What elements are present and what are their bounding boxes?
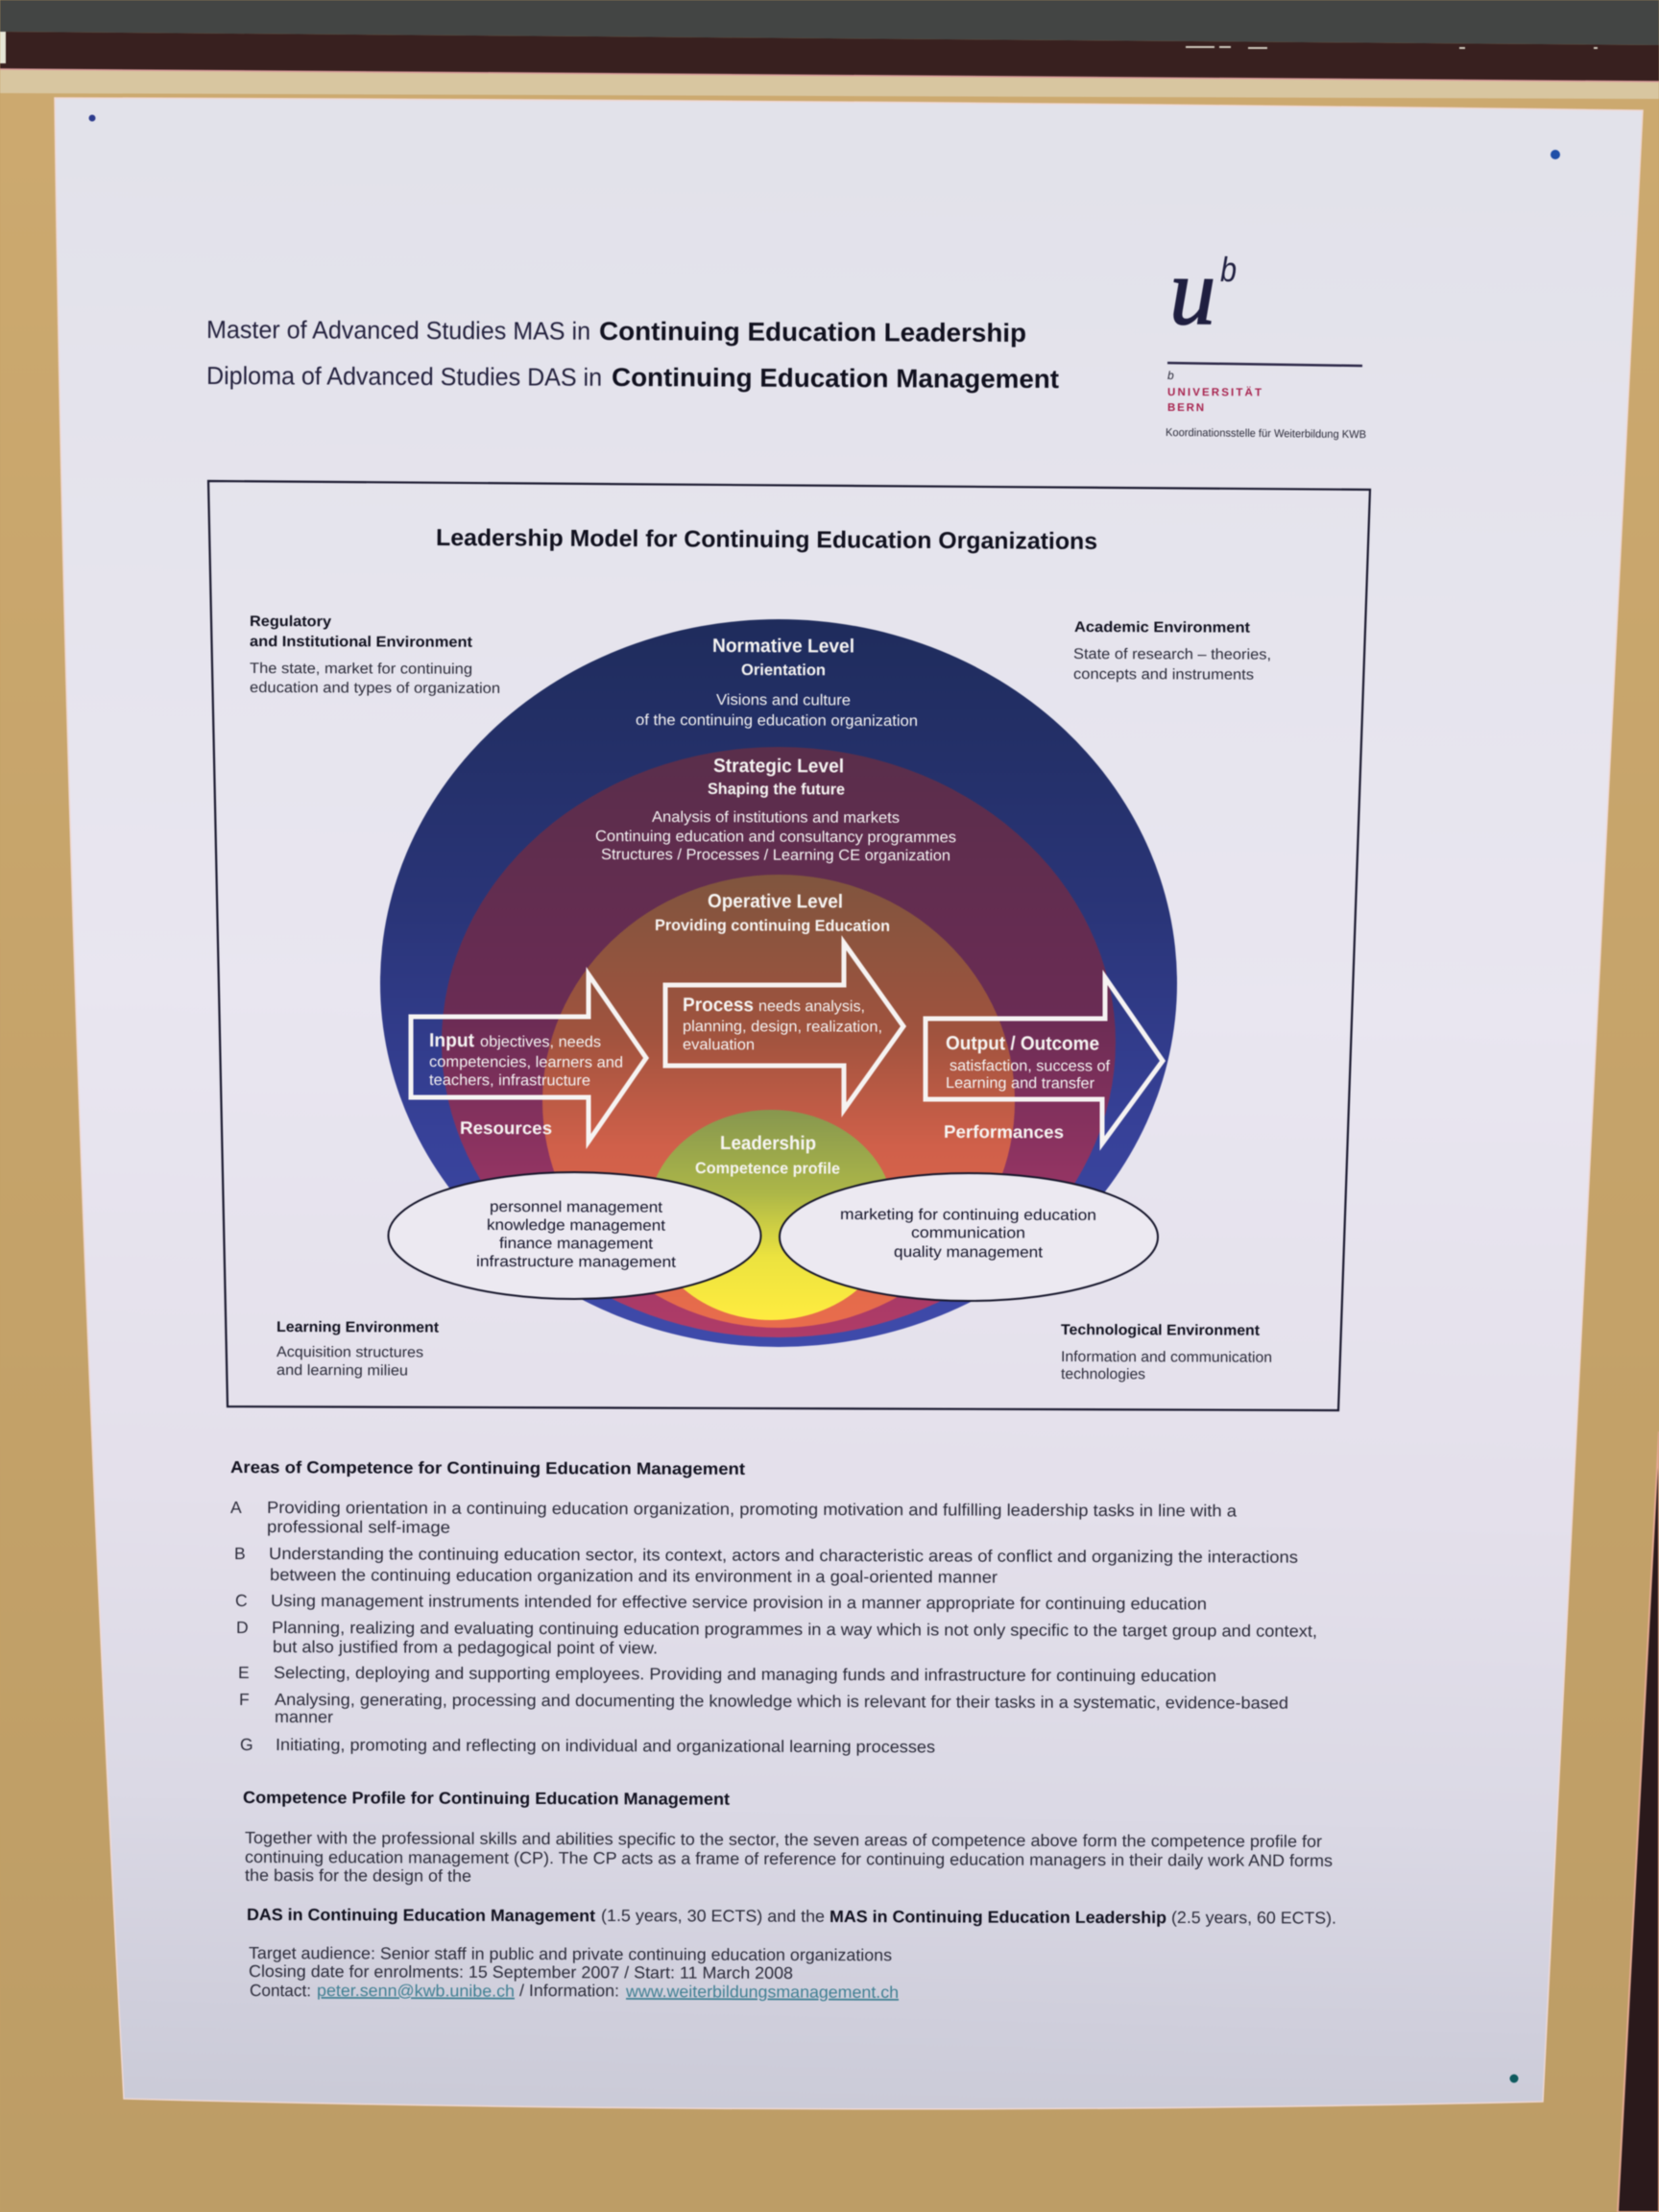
label: operative level: Operative Level — [708, 891, 843, 912]
arrow label: output / outcome: Output / Outcome — [946, 1033, 1099, 1055]
item G: G — [240, 1735, 253, 1754]
callout: left oval: finance management — [499, 1236, 654, 1253]
callout: right oval — [780, 1173, 1158, 1301]
label: operative level: Providing continuing Education — [655, 917, 890, 935]
logo mark: u: u — [1169, 238, 1215, 345]
label: normative level: Visions and culture — [716, 692, 851, 709]
arrow label: process: needs analysis, — [758, 998, 865, 1015]
item C: C — [235, 1591, 248, 1610]
text block: academic environment: concepts and instruments — [1073, 666, 1254, 684]
logo wordmark — [1167, 386, 1262, 414]
heading: areas of competence: Areas of Competence for Continuing Education Management — [230, 1457, 745, 1479]
background: pink highlight under rail — [0, 69, 1659, 82]
text block: programme durations — [247, 1905, 1336, 1928]
ring: operative level — [542, 875, 1015, 1328]
label: operative level — [655, 891, 890, 935]
label: strategic level: Analysis of institutions and markets — [652, 809, 900, 827]
text block: learning environment: Learning Environment — [276, 1319, 439, 1336]
callout: left oval: infrastructure management — [476, 1254, 677, 1271]
arrow: output / outcome — [926, 977, 1163, 1143]
arrow label: output / outcome — [946, 1033, 1111, 1093]
panel: leadership model frame — [208, 481, 1370, 1410]
logo small b: b — [1167, 369, 1174, 382]
item B — [234, 1544, 1298, 1587]
callout: left oval: personnel management — [490, 1199, 663, 1216]
arrow label: input: teachers, infrastructure — [429, 1072, 590, 1090]
header titles — [206, 315, 1059, 394]
label: strategic level: Shaping the future — [708, 781, 845, 798]
title line: DAS: Diploma of Advanced Studies DAS in — [206, 361, 602, 392]
arrow label: process: planning, design, realization, — [683, 1019, 882, 1036]
ring: normative level — [380, 619, 1177, 1347]
label: strategic level: Structures / Processes / Learning CE organization — [601, 847, 950, 864]
arrow label: output / outcome: satisfaction, success of — [950, 1058, 1111, 1075]
title line: MAS: Continuing Education Leadership — [599, 317, 1026, 348]
text block: technological environment: Information and communication — [1061, 1349, 1272, 1366]
item D: Planning, realizing and evaluating continuing education programmes in a way which is not only specific to the target group and context, — [272, 1618, 1317, 1641]
text block: technological environment: Technological Environment — [1061, 1322, 1260, 1339]
text block: programme durations: DAS in Continuing Education Management — [247, 1905, 595, 1925]
callout: right oval: quality management — [894, 1244, 1044, 1262]
pin: top left — [88, 115, 96, 121]
text block: competence profile paragraph: the basis for the design of the — [245, 1865, 471, 1886]
text block: regulatory environment — [250, 613, 500, 697]
arrow label: process — [683, 995, 882, 1053]
text block: technological environment: technologies — [1061, 1366, 1145, 1382]
text block: learning environment: and learning milieu — [276, 1362, 408, 1379]
item A: professional self-image — [267, 1517, 450, 1537]
callout: left oval — [388, 1172, 760, 1299]
item D: but also justified from a pedagogical point of view. — [273, 1637, 658, 1657]
text block: audience and contact: Contact: — [250, 1981, 311, 2000]
text block: learning environment — [276, 1319, 439, 1379]
background: dark brown rail — [0, 32, 1659, 82]
heading: competence profile: Competence Profile for Continuing Education Management — [243, 1788, 730, 1809]
item A — [230, 1498, 1237, 1537]
text block: regulatory environment: education and types of organization — [250, 680, 500, 697]
arrow label: input: competencies, learners and — [429, 1054, 623, 1071]
background: white tab at left edge — [0, 32, 6, 63]
chart: concentric leadership model — [380, 619, 1177, 1347]
text block: regulatory environment: Regulatory — [250, 613, 331, 630]
label: normative level: of the continuing education organization — [636, 712, 918, 730]
label: leadership: Leadership — [720, 1133, 816, 1154]
label: normative level — [636, 636, 918, 730]
logo mark: superscript b: b — [1220, 250, 1237, 289]
text block: competence profile paragraph: Together with the professional skills and abilities specific to the sector, the seven areas of competence above form the competence profile for — [245, 1828, 1322, 1851]
logo caption: Koordinationsstelle für Weiterbildung KWB — [1166, 427, 1366, 441]
label: performances: Performances — [944, 1121, 1064, 1142]
text block: programme durations: (1.5 years, 30 ECTS) and the — [601, 1906, 825, 1926]
item E: Selecting, deploying and supporting employees. Providing and managing funds and infrastructure for continuing education — [274, 1663, 1216, 1685]
text block: audience and contact: Closing date for enrolments: 15 September 2007 / Start: 11 March 2008 — [249, 1961, 793, 1983]
label: strategic level — [595, 756, 956, 864]
arrow label: input — [429, 1030, 623, 1090]
text block: academic environment: State of research – theories, — [1073, 646, 1271, 663]
callout: right oval: communication — [911, 1225, 1025, 1241]
item B: between the continuing education organization and its environment in a goal-oriented manner — [270, 1565, 998, 1587]
arrow label: input: objectives, needs — [480, 1034, 601, 1050]
ring: leadership core — [648, 1110, 894, 1320]
text block: learning environment: Acquisition structures — [276, 1344, 423, 1361]
text block: audience and contact: www.weiterbildungsmanagement.ch — [625, 1982, 899, 2002]
logo wordmark: BERN — [1167, 402, 1204, 414]
background: dark frame at right edge — [1618, 1431, 1659, 2212]
text block: academic environment — [1073, 619, 1271, 684]
text block: competence profile paragraph: continuing education management (CP). The CP acts as a frame of reference for continuing education managers in their daily work AND forms — [245, 1847, 1333, 1870]
item F: manner — [275, 1707, 333, 1726]
pin: top right — [1551, 150, 1560, 159]
item D: D — [236, 1618, 249, 1637]
title line: DAS — [206, 361, 1059, 394]
text block: competence profile paragraph — [245, 1828, 1333, 1886]
text block: audience and contact: Target audience: Senior staff in public and private continuing education organizations — [249, 1943, 892, 1964]
callout: right oval: marketing for continuing education — [840, 1207, 1096, 1224]
item A: Providing orientation in a continuing education organization, promoting motivation and fulfilling leadership tasks in line with a — [267, 1498, 1237, 1521]
panel heading: model title: Leadership Model for Continuing Education Organizations — [436, 525, 1097, 555]
arrow: process — [665, 943, 903, 1110]
label: resources: Resources — [460, 1118, 552, 1138]
arrow label: input: Input — [429, 1030, 474, 1051]
text block: academic environment: Academic Environment — [1074, 619, 1250, 637]
arrow label: output / outcome: Learning and transfer — [946, 1075, 1095, 1093]
label: leadership — [695, 1133, 840, 1178]
background: grey ceiling band — [0, 0, 1659, 45]
logo wordmark: UNIVERSITÄT — [1167, 386, 1262, 398]
background: specular specks on rail — [1186, 47, 1598, 48]
label: normative level: Normative Level — [712, 636, 854, 658]
item B: B — [234, 1544, 246, 1563]
text block: programme durations: MAS in Continuing Education Leadership — [830, 1907, 1166, 1927]
list: areas of competence A to G — [230, 1498, 1317, 1756]
callout: left oval: knowledge management — [487, 1217, 666, 1235]
title line: MAS — [206, 315, 1026, 348]
pin: bottom right — [1509, 2074, 1519, 2083]
item G: Initiating, promoting and reflecting on individual and organizational learning processes — [276, 1735, 935, 1756]
arrow label: process: evaluation — [683, 1037, 755, 1053]
text block: regulatory environment: and Institutional Environment — [250, 634, 472, 651]
item B: Understanding the continuing education sector, its context, actors and characteristic areas of conflict and organizing the interactions — [269, 1544, 1298, 1567]
arrow label: process: Process — [683, 995, 754, 1016]
label: strategic level: Continuing education and consultancy programmes — [595, 829, 956, 846]
text block: programme durations: (2.5 years, 60 ECTS). — [1171, 1908, 1336, 1928]
text block: audience and contact — [249, 1943, 899, 2002]
text block: regulatory environment: The state, market for continuing — [250, 661, 472, 678]
text block: audience and contact: peter.senn@kwb.unibe.ch — [317, 1981, 515, 2001]
item A: A — [230, 1498, 242, 1517]
label: normative level: Orientation — [741, 661, 826, 679]
item F: F — [239, 1690, 250, 1709]
label: leadership: Competence profile — [695, 1160, 840, 1178]
text block: technological environment — [1061, 1322, 1272, 1382]
title line: DAS: Continuing Education Management — [612, 363, 1059, 394]
item F — [239, 1690, 1288, 1726]
title line: MAS: Master of Advanced Studies MAS in — [206, 315, 590, 346]
ring: strategic level — [442, 747, 1116, 1337]
logo: University of Bern — [1166, 238, 1366, 441]
arrow: input — [411, 974, 646, 1142]
label: strategic level: Strategic Level — [713, 756, 844, 777]
item F: Analysing, generating, processing and documenting the knowledge which is relevant for their tasks in a systematic, evidence-based — [275, 1690, 1288, 1713]
item E: E — [238, 1663, 250, 1682]
item D — [236, 1618, 1317, 1657]
item C: Using management instruments intended for effective service provision in a manner appropriate for continuing education — [271, 1591, 1207, 1613]
text block: audience and contact: / Information: — [519, 1981, 619, 2000]
background: cream ledge — [0, 69, 1659, 99]
